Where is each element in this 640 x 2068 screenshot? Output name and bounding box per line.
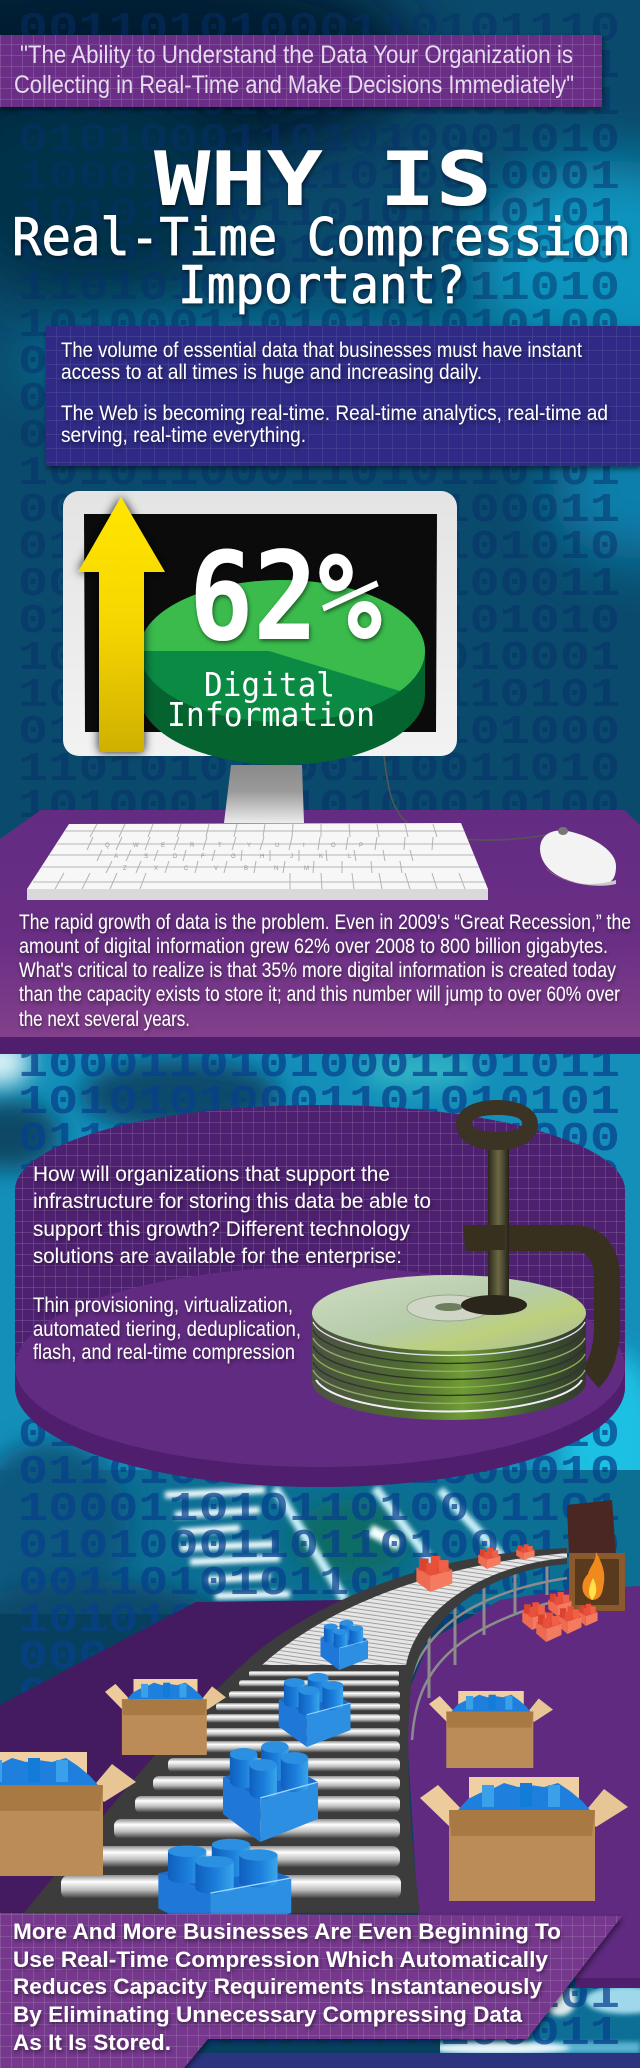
panel: factory floor left bbox=[0, 1600, 350, 1913]
railing bbox=[406, 1565, 567, 1740]
bottom banner: More And More Businesses Are Even Beginning To bbox=[13, 1919, 561, 1944]
binary digit pattern: 00110101010110100011 bbox=[18, 2011, 620, 2057]
binary digit pattern: 00011010100011011101 bbox=[18, 1265, 620, 1311]
bottom banner: Use Real-Time Compression Which Automatically bbox=[13, 1947, 549, 1972]
keyboard: ZXCVBNM bbox=[123, 866, 309, 872]
binary digit pattern: 00011010100011011101 bbox=[18, 377, 620, 423]
binary digit pattern: 10001101010001101011 bbox=[18, 81, 620, 127]
quote banner bbox=[0, 35, 602, 107]
binary digit pattern: 00011010100011011101 bbox=[18, 1635, 620, 1681]
monitor bbox=[63, 491, 457, 756]
disc text: infrastructure for storing this data be able to bbox=[33, 1190, 431, 1213]
binary digit pattern: 10101100011010110101 bbox=[18, 1974, 620, 2020]
binary digit pattern: 00110101011010110101 bbox=[18, 1561, 620, 1607]
binary digit pattern: 10101000110101011010 bbox=[18, 1598, 620, 1644]
binary digit pattern: 01101011010100011000 bbox=[18, 1117, 620, 1163]
binary digit pattern: 10101000110101110101 bbox=[18, 192, 620, 238]
title: WHY IS bbox=[154, 135, 492, 223]
binary digit pattern: 11010101000110011010 bbox=[18, 1154, 620, 1200]
binary digit pattern: 10100011010100010100 bbox=[18, 1191, 620, 1237]
intro panel bbox=[46, 326, 640, 466]
monitor stand bbox=[224, 765, 304, 823]
binary digit pattern: 01010001101010100011 bbox=[18, 414, 620, 460]
binary digit pattern: 01101010011010101000 bbox=[18, 710, 620, 756]
binary digit pattern: 01010001101010100011 bbox=[18, 1302, 620, 1348]
binary digit pattern: 00110101000110101110 bbox=[18, 7, 620, 53]
desk paragraph: the next several years. bbox=[19, 1008, 190, 1031]
disc text: How will organizations that support the bbox=[33, 1163, 390, 1186]
binary digit pattern: 10101010001101010101 bbox=[18, 1080, 620, 1126]
binary digit pattern: 01011010110101101010 bbox=[18, 525, 620, 571]
binary digit pattern: 10101100011010110101 bbox=[18, 451, 620, 497]
panel: factory floor right bbox=[405, 1586, 640, 1988]
keyboard: QWERTYUIOP bbox=[105, 843, 363, 849]
panel: cylinder disc bbox=[15, 1105, 625, 1487]
red blocks on conveyor bbox=[416, 1544, 535, 1592]
quote banner: "The Ability to Understand the Data Your Organization is bbox=[20, 41, 573, 69]
binary digit pattern: 01010001101010100011 bbox=[18, 1672, 620, 1718]
conveyor rollers bbox=[61, 1671, 401, 1899]
binary digit pattern: 11010101000110011010 bbox=[18, 747, 620, 793]
pie chart: 62% digital information: Information bbox=[167, 695, 375, 734]
background streaks bbox=[165, 1488, 505, 1600]
bottom banner: As It Is Stored. bbox=[13, 2030, 171, 2055]
binary digit pattern: 10100011010101010100 bbox=[18, 303, 620, 349]
bottom banner: Reduces Capacity Requirements Instantaneously bbox=[13, 1974, 543, 1999]
binary digit pattern: 00101101000110100011 bbox=[18, 562, 620, 608]
keyboard: ASDFGHJKL bbox=[114, 854, 352, 860]
bottom banner: By Eliminating Unnecessary Compressing Data bbox=[13, 2002, 523, 2027]
binary digit pattern: 00110101010110100011 bbox=[18, 488, 620, 534]
desk paragraph bbox=[19, 911, 631, 1031]
binary digit pattern: 10001101011010001101 bbox=[18, 1487, 620, 1533]
binary digit pattern: 01101000110101000110 bbox=[18, 340, 620, 386]
bottom strip bbox=[0, 2053, 640, 2068]
binary digit pattern: 01101000110101000010 bbox=[18, 1450, 620, 1496]
binary digit pattern: 01010001101010001010 bbox=[18, 118, 620, 164]
cardboard boxes with blue blocks bbox=[0, 1679, 628, 1901]
pie chart: 62% digital information: Digital bbox=[204, 665, 335, 704]
binary digit pattern: 01011010110101101010 bbox=[18, 1413, 620, 1459]
disc text: automated tiering, deduplication, bbox=[33, 1318, 301, 1341]
big number 62%: 62% bbox=[189, 526, 382, 668]
panel: purple desk bbox=[0, 810, 640, 1054]
bottom banner bbox=[0, 1913, 622, 2068]
conveyor belt bbox=[24, 1548, 567, 1913]
icon: CD stack bbox=[312, 1275, 586, 1420]
binary digit pattern: 01011011011011101010 bbox=[18, 599, 620, 645]
mouse bbox=[540, 827, 616, 886]
furnace bbox=[567, 1500, 625, 1611]
binary digit pattern: 01101000110101000110 bbox=[18, 1228, 620, 1274]
binary digit pattern: 10100011010100110101 bbox=[18, 673, 620, 719]
title: Important? bbox=[178, 256, 465, 316]
icon: clamp back arm bbox=[465, 1238, 607, 1378]
disc text bbox=[33, 1163, 431, 1364]
binary digit pattern: 01101011010100011010 bbox=[18, 229, 620, 275]
binary digit pattern: 10001101011101010001 bbox=[18, 636, 620, 682]
intro panel: serving, real-time everything. bbox=[61, 424, 306, 447]
binary digit pattern: 10001101011010010001 bbox=[18, 155, 620, 201]
icon: clamp screw bbox=[456, 1100, 538, 1315]
keyboard bbox=[27, 823, 488, 900]
title bbox=[12, 135, 631, 316]
icon: yellow up arrow bbox=[78, 497, 165, 752]
disc text: flash, and real-time compression bbox=[33, 1341, 295, 1364]
intro panel: The volume of essential data that businesses must have instant bbox=[61, 339, 582, 362]
binary digit pattern: 11010101000110011010 bbox=[18, 266, 620, 312]
disc text: solutions are available for the enterprise: bbox=[33, 1245, 402, 1268]
red block pile bbox=[522, 1592, 598, 1642]
binary digit pattern: 10101100011010110101 bbox=[18, 1339, 620, 1385]
pie chart: 62% digital information bbox=[139, 580, 425, 765]
mouse cable bbox=[384, 756, 563, 840]
binary digit pattern: 00110101010110100011 bbox=[18, 1376, 620, 1422]
quote banner: Collecting in Real-Time and Make Decisions Immediately" bbox=[14, 71, 574, 99]
binary digit pattern: 01101010001101010001 bbox=[18, 44, 620, 90]
blue blocks on conveyor bbox=[158, 1620, 368, 1935]
intro panel: access to at all times is huge and increasing daily. bbox=[61, 361, 482, 384]
binary digit pattern: 10001101010001101011 bbox=[18, 1043, 620, 1089]
binary digit pattern: 01010001101101000110 bbox=[18, 1524, 620, 1570]
binary digit pattern: 10100011010100010100 bbox=[18, 784, 620, 830]
disc text: support this growth? Different technology bbox=[33, 1218, 410, 1241]
disc text: Thin provisioning, virtualization, bbox=[33, 1294, 293, 1317]
